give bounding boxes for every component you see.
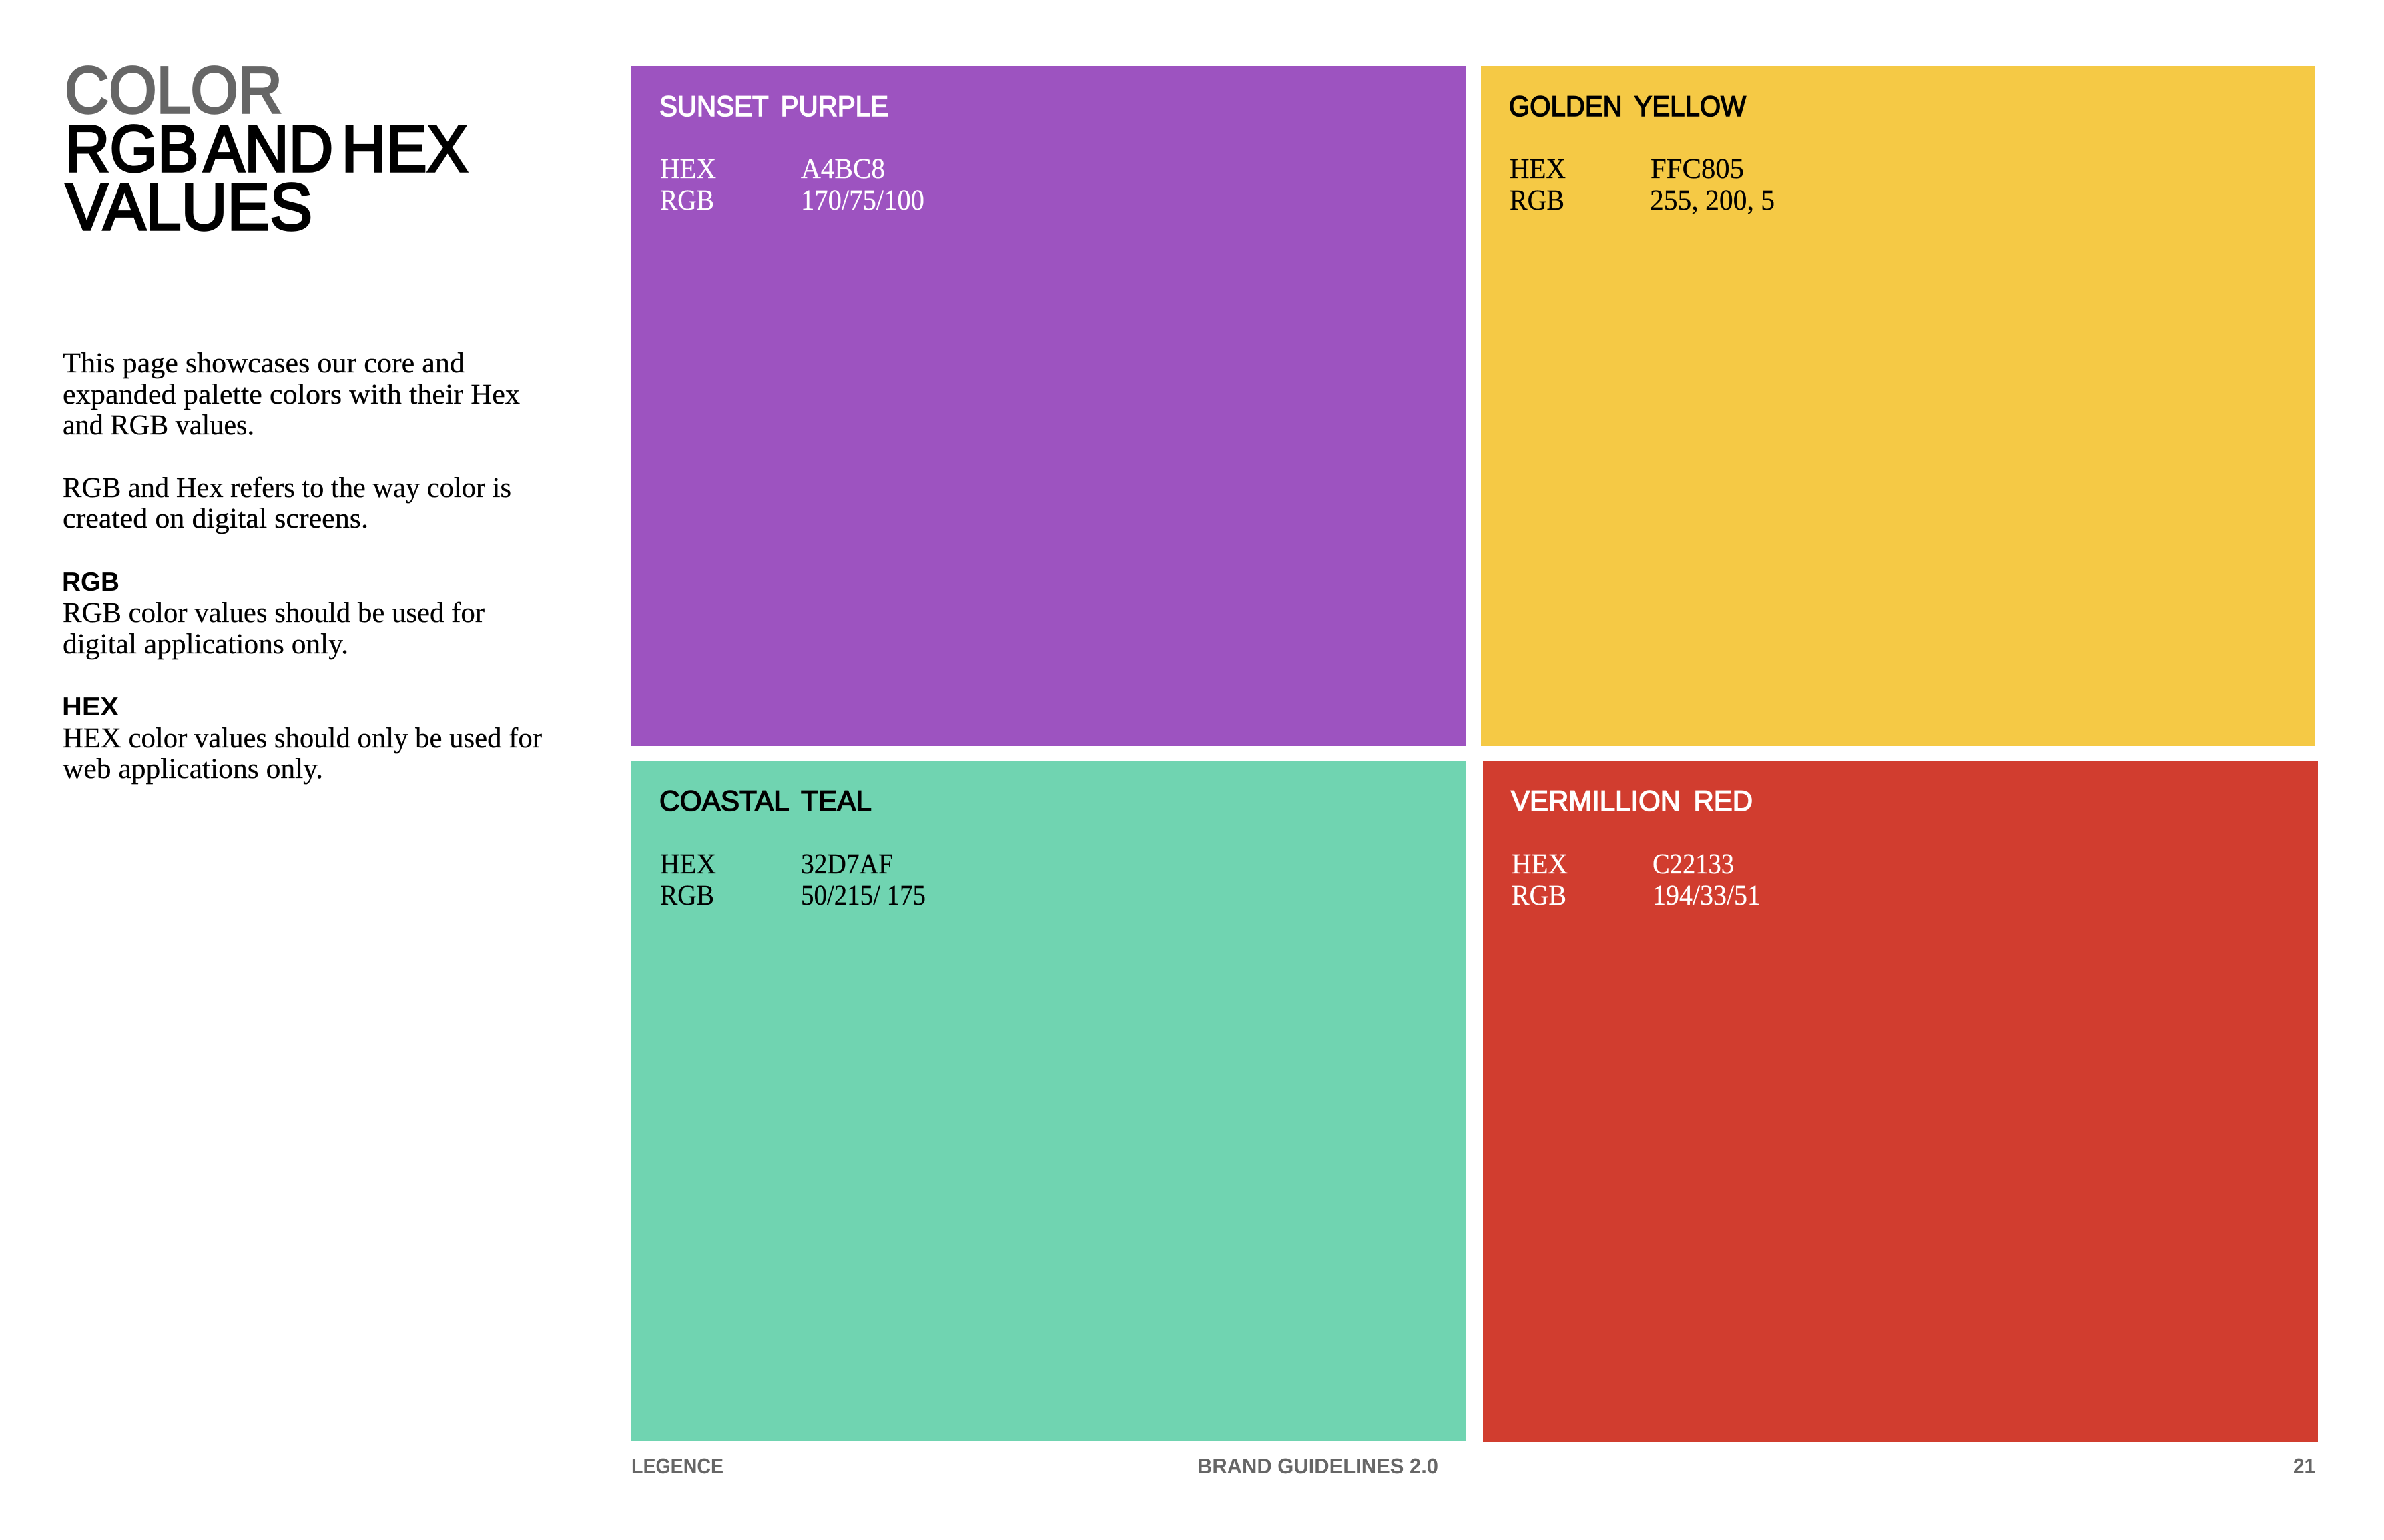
hex value row: HEX (1510, 153, 1566, 185)
footer (631, 1454, 2315, 1478)
color name: COASTAL TEAL (659, 785, 872, 817)
RGB and Hex paragraph: RGB and Hex refers to the way color is (63, 472, 511, 504)
title line: COLOR: COLOR (65, 53, 282, 127)
title line: VALUES: VALUES (65, 169, 312, 244)
RGB usage note: RGB (62, 568, 119, 597)
hex value row: C22133 (1653, 849, 1734, 880)
color name: GOLDEN YELLOW (1509, 91, 1746, 123)
rgb value row (1512, 880, 1761, 911)
intro paragraph: This page showcases our core and (63, 348, 465, 379)
intro paragraph: and RGB values. (63, 410, 254, 441)
hex value row (1512, 849, 1734, 880)
hex value row (660, 153, 885, 185)
hex value row: HEX (660, 153, 716, 185)
rgb value row: 194/33/51 (1653, 880, 1761, 911)
hex value row: HEX (1512, 849, 1568, 880)
RGB usage note: RGB color values should be used for (63, 597, 485, 629)
footer: document title: BRAND GUIDELINES 2.0 (1197, 1454, 1438, 1478)
hex value row: A4BC8 (801, 153, 885, 185)
HEX usage note: HEX (62, 693, 119, 721)
panel: sunset purple (631, 66, 1466, 746)
color name: VERMILLION RED (1511, 785, 1753, 817)
rgb value row (1510, 185, 1775, 216)
title (65, 53, 468, 244)
hex value row (660, 849, 893, 880)
footer: page number: 21 (2293, 1454, 2315, 1478)
rgb value row: RGB (1512, 880, 1566, 911)
RGB usage note: digital applications only. (63, 629, 348, 660)
color name: SUNSET PURPLE (659, 91, 888, 123)
HEX usage note (62, 693, 542, 785)
footer: brand name: LEGENCE (631, 1454, 723, 1478)
intro paragraph (63, 348, 520, 441)
HEX usage note: web applications only. (63, 753, 323, 785)
rgb value row: RGB (660, 880, 714, 911)
RGB and Hex paragraph: created on digital screens. (63, 503, 368, 534)
panel: golden yellow (1481, 66, 2315, 746)
panel: vermillion red (1483, 761, 2318, 1442)
hex value row (1510, 153, 1744, 185)
rgb value row (660, 185, 924, 216)
RGB usage note (62, 568, 485, 660)
HEX usage note: HEX color values should only be used for (63, 723, 542, 754)
text block: description (62, 348, 542, 785)
rgb value row: 50/215/ 175 (801, 880, 926, 911)
hex value row: 32D7AF (801, 849, 893, 880)
title line: RGB AND HEX: RGB AND HEX (65, 111, 468, 185)
hex value row: HEX (660, 849, 716, 880)
rgb value row (660, 880, 926, 911)
hex value row: FFC805 (1651, 153, 1744, 185)
rgb value row: 255, 200, 5 (1650, 185, 1775, 216)
panel: coastal teal (631, 761, 1466, 1441)
rgb value row: RGB (660, 185, 714, 216)
RGB and Hex paragraph (63, 472, 511, 534)
rgb value row: RGB (1510, 185, 1564, 216)
rgb value row: 170/75/100 (801, 185, 924, 216)
intro paragraph: expanded palette colors with their Hex (63, 379, 520, 410)
